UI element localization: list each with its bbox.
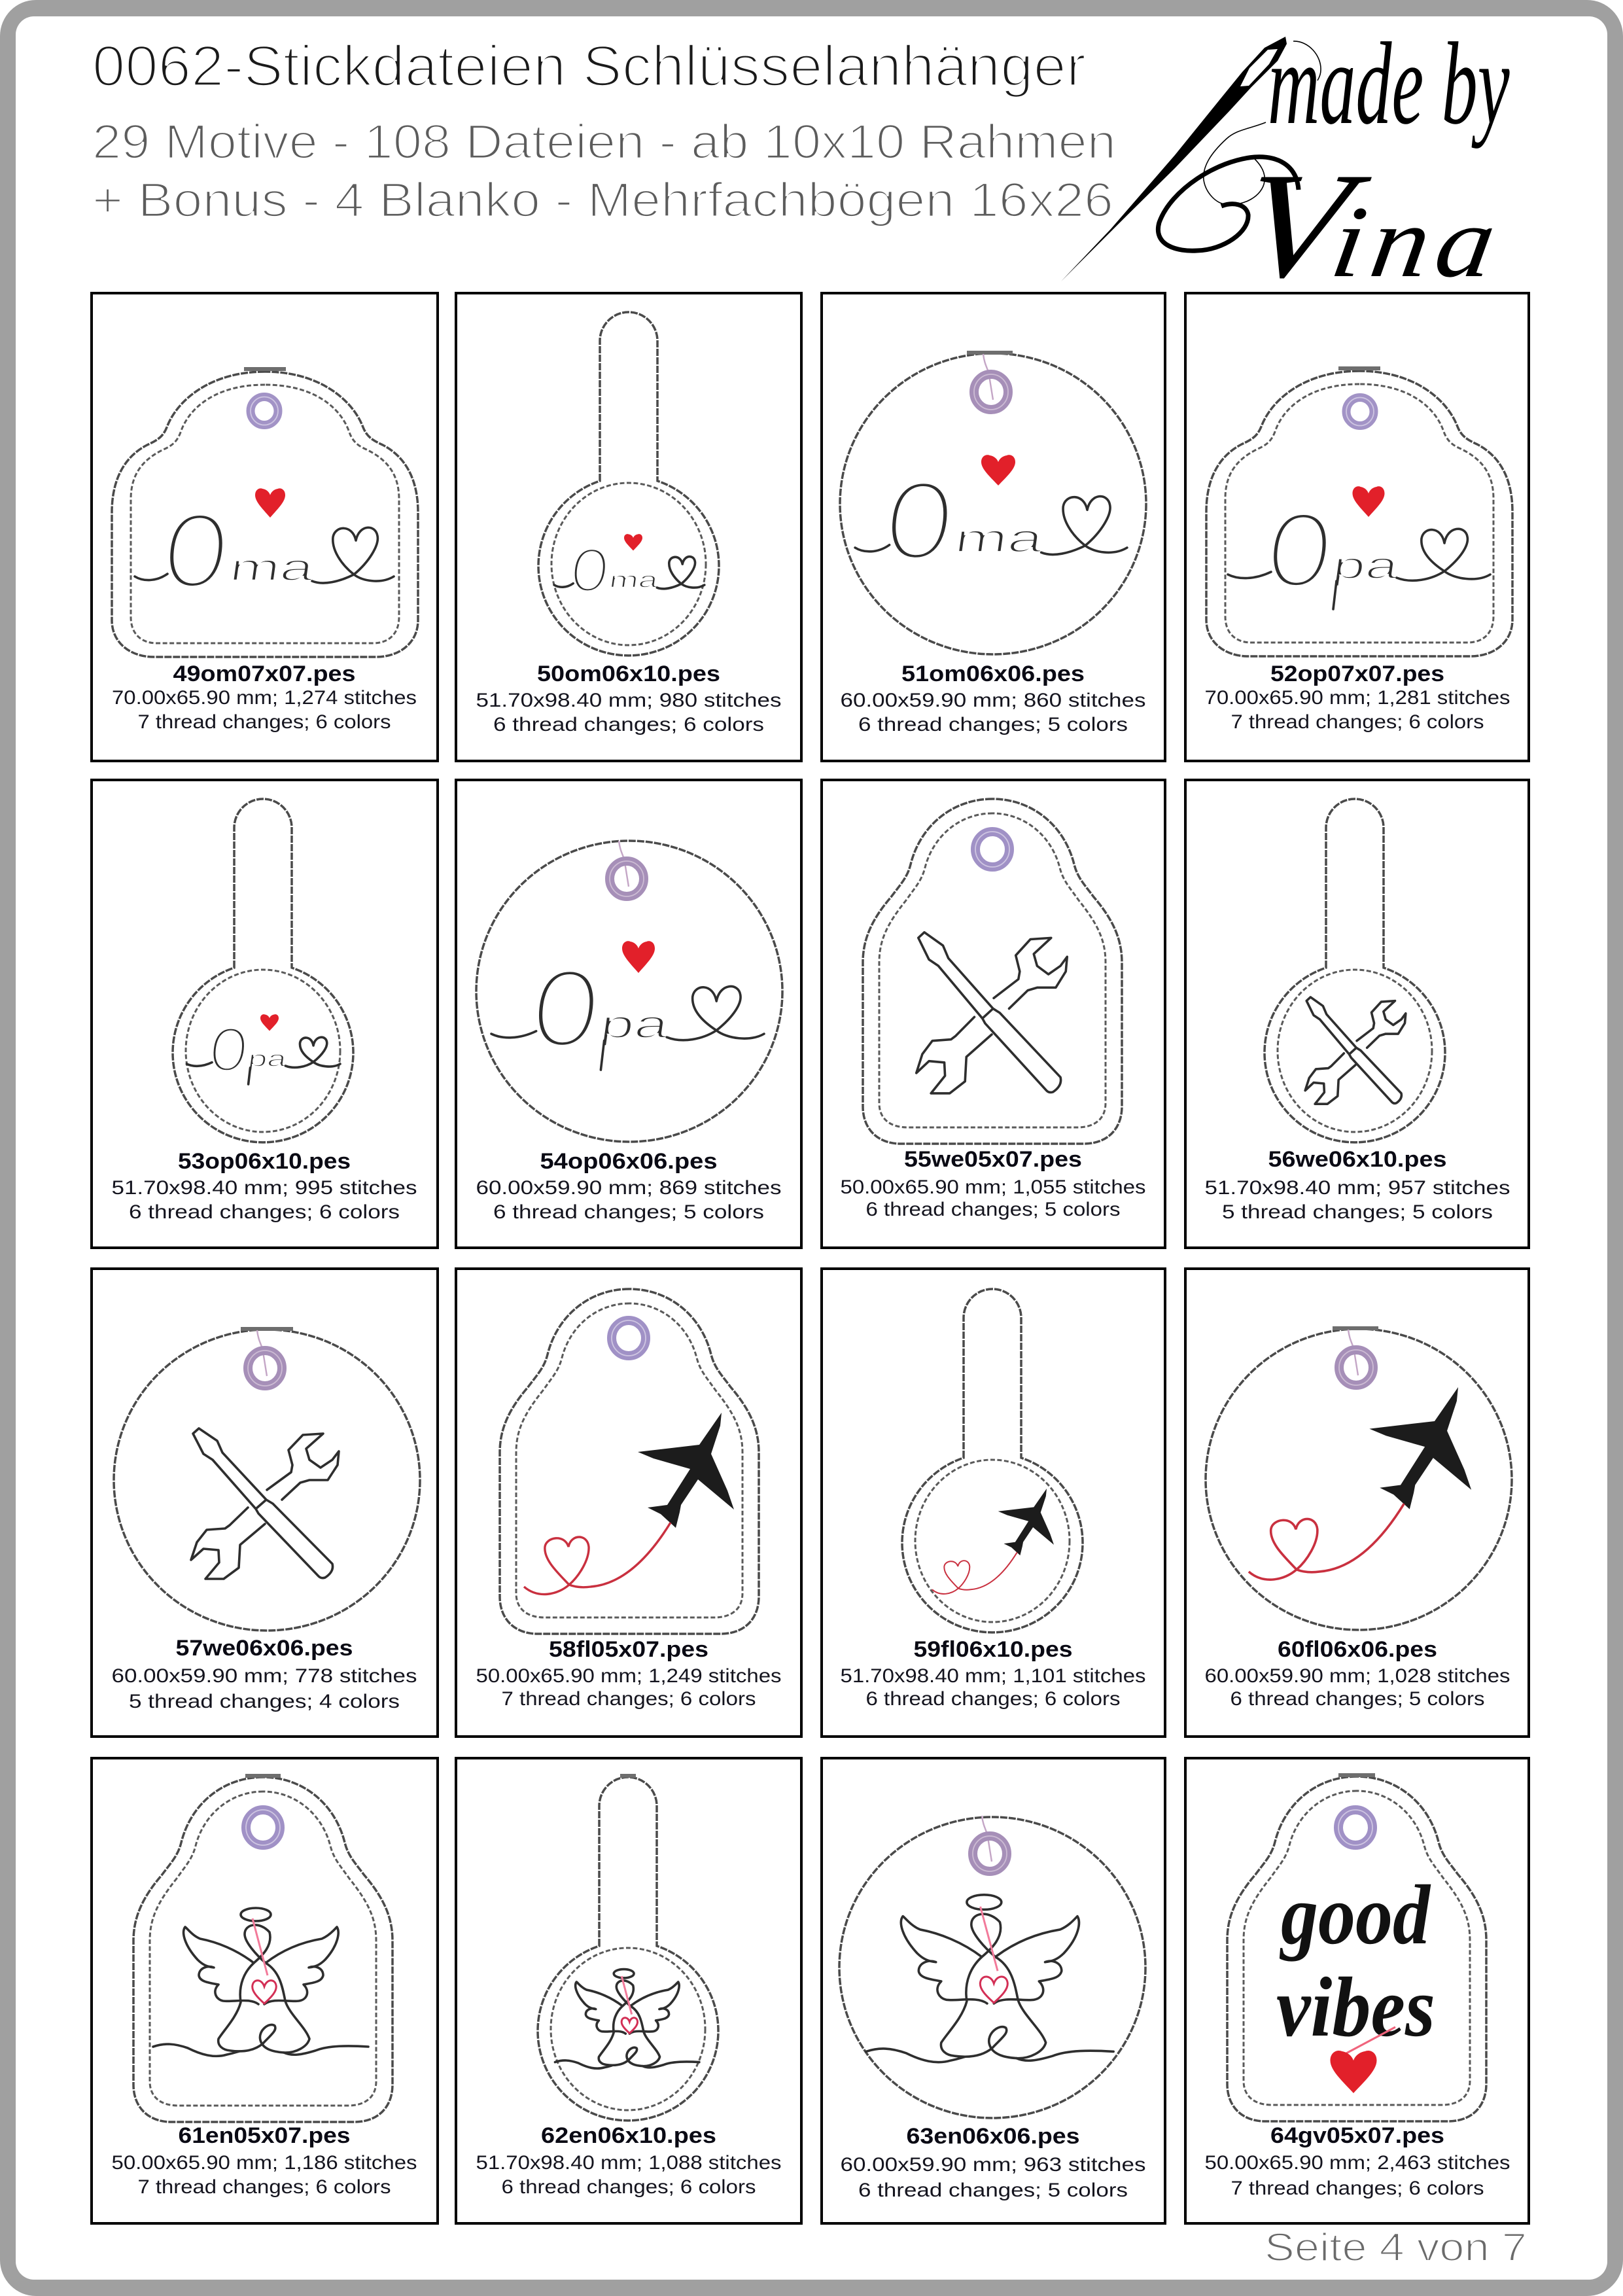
motif: good vibes lettering line 2: vibes <box>1276 1960 1435 2055</box>
size and stitches: 51.70x98.40 mm; 957 stitches <box>1205 1177 1510 1199</box>
motif: angel <box>153 1908 368 2056</box>
subtitle line 1: 29 Motive - 108 Dateien - ab 10x10 Rahmen <box>92 115 1116 169</box>
motif: Opa <box>186 1015 340 1085</box>
ring <box>973 1816 1007 1871</box>
filename: 53op06x10.pes <box>178 1149 351 1174</box>
tag outline <box>538 1777 718 2121</box>
heart <box>624 534 642 551</box>
size and stitches: 60.00x59.90 mm; 869 stitches <box>476 1177 781 1199</box>
ring <box>1339 1330 1373 1385</box>
filename: 58fl05x07.pes <box>549 1637 708 1662</box>
heart <box>1331 2051 1376 2093</box>
icon: needle <box>1061 37 1287 281</box>
thread changes: 6 thread changes; 5 colors <box>493 1201 764 1223</box>
subtitle line 2: + Bonus - 4 Blanko - Mehrfachbögen 16x26 <box>92 173 1113 227</box>
thread changes: 7 thread changes; 6 colors <box>137 711 391 733</box>
card: 57we06x06 <box>92 1269 438 1737</box>
filename: 49om07x07.pes <box>173 662 356 686</box>
tag outline <box>133 1777 393 2122</box>
tag outline <box>500 1289 759 1634</box>
motif: plane <box>1249 1387 1471 1580</box>
page number: Seite 4 von 7 <box>1265 2225 1527 2269</box>
thread <box>1204 41 1321 205</box>
card: 49om07x07 <box>92 293 438 761</box>
thread changes: 6 thread changes; 5 colors <box>866 1199 1120 1220</box>
filename: 51om06x06.pes <box>901 662 1085 686</box>
filename: 56we06x10.pes <box>1268 1147 1447 1172</box>
card: 60fl06x06 <box>1185 1269 1529 1737</box>
size and stitches: 50.00x65.90 mm; 1,186 stitches <box>111 2152 417 2174</box>
motif: plane <box>932 1489 1054 1594</box>
size and stitches: 60.00x59.90 mm; 963 stitches <box>840 2154 1146 2176</box>
thread changes: 7 thread changes; 6 colors <box>137 2176 391 2198</box>
card: 51om06x06 <box>822 293 1165 761</box>
logo flourish <box>1158 157 1299 251</box>
motif: Oma <box>855 457 1127 584</box>
thread changes: 7 thread changes; 6 colors <box>1231 711 1484 733</box>
tag outline <box>902 1289 1083 1633</box>
tag outline <box>1206 366 1512 656</box>
size and stitches: 51.70x98.40 mm; 980 stitches <box>476 690 781 711</box>
filename: 54op06x06.pes <box>540 1149 717 1174</box>
tag outline <box>840 353 1146 654</box>
filename: 63en06x06.pes <box>907 2124 1079 2149</box>
size and stitches: 60.00x59.90 mm; 860 stitches <box>840 690 1146 711</box>
card: 63en06x06 <box>822 1758 1165 2223</box>
filename: 61en05x07.pes <box>178 2123 351 2148</box>
tag outline <box>1206 1329 1512 1630</box>
filename: 64gv05x07.pes <box>1270 2123 1444 2148</box>
heart <box>255 488 285 518</box>
motif: tools <box>191 1428 339 1579</box>
filename: 52op07x07.pes <box>1270 662 1444 686</box>
card: 58fl05x07 <box>456 1269 801 1737</box>
motif: tools <box>916 932 1067 1093</box>
ring <box>251 397 278 425</box>
thread changes: 5 thread changes; 4 colors <box>129 1691 400 1712</box>
tag outline <box>863 799 1122 1144</box>
motif: Opa <box>1228 489 1490 610</box>
size and stitches: 60.00x59.90 mm; 1,028 stitches <box>1205 1665 1510 1687</box>
tag outline <box>1227 1776 1486 2121</box>
thread changes: 6 thread changes; 6 colors <box>129 1201 400 1223</box>
card: 61en05x07 <box>92 1758 438 2223</box>
card: 52op07x07 <box>1185 293 1529 761</box>
thread changes: 6 thread changes; 6 colors <box>493 714 764 735</box>
thread line <box>1346 2027 1395 2053</box>
tag outline <box>476 841 782 1142</box>
ring <box>246 1810 280 1845</box>
thread changes: 6 thread changes; 6 colors <box>866 1688 1120 1710</box>
logo: needle and made by Vina <box>1061 19 1518 309</box>
filename: 55we05x07.pes <box>904 1147 1082 1172</box>
tag outline <box>538 312 719 656</box>
tag outline <box>839 1817 1145 2118</box>
card: 59fl06x10 <box>822 1269 1165 1737</box>
thread changes: 6 thread changes; 6 colors <box>501 2176 756 2198</box>
size and stitches: 50.00x65.90 mm; 1,055 stitches <box>840 1176 1146 1198</box>
heart <box>1353 486 1384 517</box>
card: 56we06x10 <box>1185 780 1529 1248</box>
thread changes: 7 thread changes; 6 colors <box>1231 2178 1484 2199</box>
ring <box>1346 398 1374 425</box>
ring <box>1338 1810 1372 1845</box>
thread changes: 7 thread changes; 6 colors <box>501 1688 756 1710</box>
tag outline <box>1265 799 1445 1142</box>
tag outline <box>173 799 353 1142</box>
size and stitches: 70.00x65.90 mm; 1,274 stitches <box>112 687 417 709</box>
card: 55we05x07 <box>822 780 1165 1248</box>
ring <box>974 354 1008 410</box>
size and stitches: 51.70x98.40 mm; 995 stitches <box>111 1177 417 1199</box>
motif: plane <box>524 1413 734 1595</box>
filename: 62en06x10.pes <box>541 2123 716 2148</box>
thread changes: 6 thread changes; 5 colors <box>1230 1688 1485 1710</box>
tag outline <box>114 1330 420 1631</box>
thread changes: 6 thread changes; 5 colors <box>858 714 1128 735</box>
motif: angel <box>555 1969 699 2068</box>
card: 64gv05x07 <box>1185 1758 1529 2223</box>
size and stitches: 51.70x98.40 mm; 1,088 stitches <box>476 2152 781 2174</box>
thread changes: 5 thread changes; 5 colors <box>1222 1201 1493 1223</box>
logo text: Vina: Vina <box>1231 142 1518 309</box>
ring <box>975 832 1009 867</box>
thread changes: 6 thread changes; 5 colors <box>858 2180 1128 2201</box>
size and stitches: 50.00x65.90 mm; 1,249 stitches <box>476 1665 781 1687</box>
card: 62en06x10 <box>456 1758 801 2223</box>
ring <box>248 1330 282 1386</box>
size and stitches: 51.70x98.40 mm; 1,101 stitches <box>840 1665 1146 1687</box>
motif: Oma <box>135 490 394 610</box>
motif: Oma <box>554 536 705 605</box>
card: 50om06x10 <box>456 293 801 761</box>
filename: 59fl06x10.pes <box>913 1637 1073 1662</box>
motif: tools <box>1305 997 1406 1104</box>
ring <box>612 1320 646 1356</box>
ring <box>610 841 644 896</box>
heart <box>260 1014 279 1031</box>
motif: angel <box>866 1895 1113 2062</box>
filename: 50om06x10.pes <box>537 662 720 686</box>
tag outline <box>112 367 418 657</box>
title: 0062-Stickdateien Schlüsselanhänger <box>92 33 1086 98</box>
card: 53op06x10 <box>92 780 438 1248</box>
heart <box>622 941 655 973</box>
filename: 57we06x06.pes <box>175 1636 353 1661</box>
motif: Opa <box>491 946 764 1071</box>
size and stitches: 70.00x65.90 mm; 1,281 stitches <box>1205 687 1510 709</box>
size and stitches: 50.00x65.90 mm; 2,463 stitches <box>1205 2152 1510 2174</box>
filename: 60fl06x06.pes <box>1278 1637 1437 1662</box>
size and stitches: 60.00x59.90 mm; 778 stitches <box>111 1665 417 1687</box>
card: 54op06x06 <box>456 780 801 1248</box>
motif: good vibes lettering: good <box>1279 1868 1431 1962</box>
logo text: made by: made by <box>1268 19 1510 149</box>
heart <box>981 455 1015 486</box>
